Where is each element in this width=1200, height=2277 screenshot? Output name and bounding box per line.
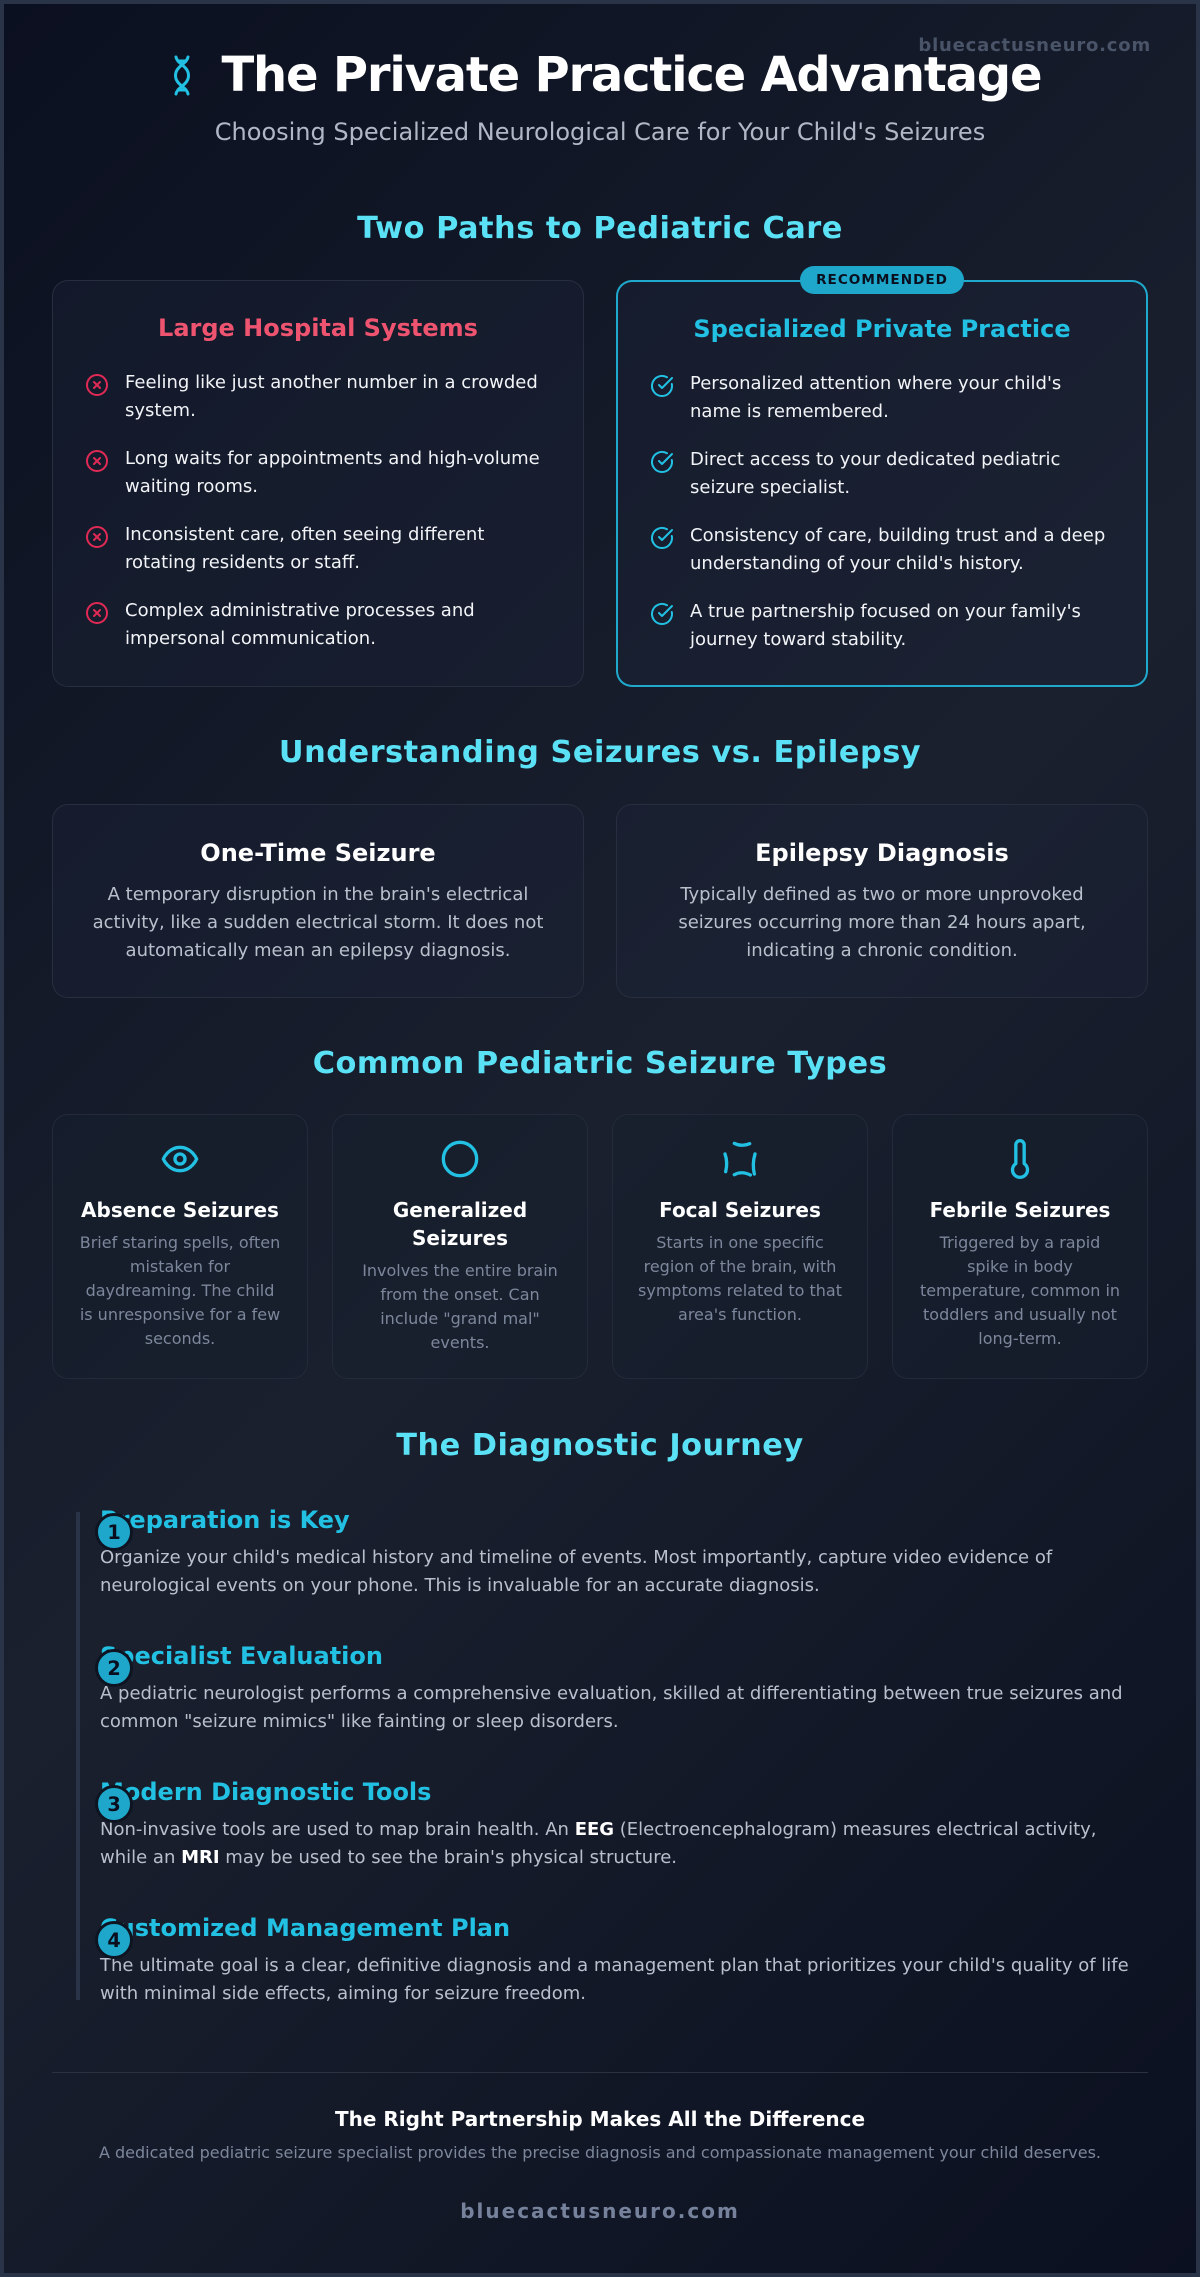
card text: is unresponsive for a few [80,1305,280,1324]
card text: region of the brain, with [644,1257,836,1276]
badge: recommended [800,266,964,294]
step 1 number: 1 [107,1521,121,1544]
icon: x circle [86,374,108,396]
list item [690,601,1081,650]
panel: febrile seizures [892,1114,1148,1379]
panel: specialized private practice [616,280,1148,687]
icon: focal arcs [723,1142,757,1177]
list item: Personalized attention where your child's [690,373,1061,394]
panel: one-time seizure [52,804,584,998]
card text [93,884,543,961]
list item [125,448,540,497]
heading: diagnostic journey: The Diagnostic Journey [396,1428,804,1463]
card text: Involves the entire brain [362,1261,558,1280]
badge: recommended: RECOMMENDED [816,272,948,288]
step 1 text: Organize your child's medical history and timeline of events. Most importantly, capture video evidence of [100,1547,1052,1568]
panel: focal seizures [612,1114,868,1379]
heading: seizure types: Common Pediatric Seizure Types [313,1046,887,1081]
panel: epilepsy diagnosis [616,804,1148,998]
list item: A true partnership focused on your family's [690,601,1081,622]
card text: Typically defined as two or more unprovoked [680,884,1084,905]
step 4 number: 4 [107,1929,121,1952]
subtitle: Choosing Specialized Neurological Care for Your Child's Seizures [215,118,985,146]
step 3 text: Non-invasive tools are used to map brain health. An EEG (Electroencephalogram) measures electrical activity, [100,1819,1097,1840]
card text [638,1233,842,1324]
step 2 number [95,1649,133,1687]
list item [125,372,538,421]
icon: thermometer [1010,1139,1030,1179]
heading: seizures vs epilepsy: Understanding Seizures vs. Epilepsy [279,735,921,770]
card text: include "grand mal" [380,1309,540,1328]
list item [690,525,1105,574]
step 1 heading: Preparation is Key [100,1506,350,1534]
list item: Consistency of care, building trust and a deep [690,525,1105,546]
step 1 number [95,1513,133,1551]
panel: large hospital systems [52,280,584,687]
card heading: Epilepsy Diagnosis [755,839,1009,867]
step 2 text [100,1683,1123,1732]
card title: Seizures [412,1226,508,1250]
icon: x circle [86,450,108,472]
list item: Feeling like just another number in a crowded [125,372,538,393]
step 4 number [95,1921,133,1959]
list item: seizure specialist. [690,477,850,498]
card text: seconds. [145,1329,215,1348]
icon: check circle [650,450,673,473]
list item: Direct access to your dedicated pediatric [690,449,1060,470]
card text: daydreaming. The child [86,1281,274,1300]
step 2 text: common "seizure mimics" like fainting or sleep disorders. [100,1711,619,1732]
list item: name is remembered. [690,401,889,422]
icon: check circle [650,526,673,549]
step 4 text: The ultimate goal is a clear, definitive diagnosis and a management plan that prioritizes your child's quality of life [100,1955,1129,1976]
step 3 text: while an MRI may be used to see the brain's physical structure. [100,1847,677,1868]
list item: journey toward stability. [690,629,906,650]
title: The Private Practice Advantage [222,47,1041,103]
footer site name: bluecactusneuro.com [460,2199,740,2223]
panel heading: Large Hospital Systems [158,314,478,342]
card text: long-term. [978,1329,1062,1348]
heading: two paths: Two Paths to Pediatric Care [357,211,843,246]
step 3 text [100,1819,1097,1868]
card text [920,1233,1120,1348]
step 1 text [100,1547,1053,1596]
card text: mistaken for [130,1257,230,1276]
step 4 text [100,1955,1129,2004]
list item: system. [125,400,196,421]
card text: A temporary disruption in the brain's electrical [108,884,528,905]
footer heading: The Right Partnership Makes All the Difference [335,2107,865,2131]
step 4 heading: Customized Management Plan [100,1914,510,1942]
step 2 text: A pediatric neurologist performs a comprehensive evaluation, skilled at differentiating between true seizures and [100,1683,1123,1704]
card text: Triggered by a rapid [940,1233,1100,1252]
card text [362,1261,558,1352]
list item [125,600,475,649]
icon: circle [442,1140,478,1178]
card text [678,884,1086,961]
list item: impersonal communication. [125,628,376,649]
card text: Starts in one specific [656,1233,824,1252]
card text: seizures occurring more than 24 hours apart, [678,912,1086,933]
card text: symptoms related to that [638,1281,842,1300]
step 3 heading: Modern Diagnostic Tools [100,1778,431,1806]
card title: Absence Seizures [81,1198,279,1222]
card text [80,1233,280,1348]
list item: understanding of your child's history. [690,553,1024,574]
card title [393,1198,527,1250]
icon: x circle [86,526,108,548]
list item: Long waits for appointments and high-volume [125,448,540,469]
footer [52,2072,1148,2242]
list item [690,373,1061,422]
icon: check circle [650,602,673,625]
card text: Brief staring spells, often [80,1233,280,1252]
icon: check circle [650,374,673,397]
step 3 number [95,1785,133,1823]
timeline line [76,1512,80,2000]
card title: Generalized [393,1198,527,1222]
list item [125,524,484,573]
icon: eye [162,1146,198,1172]
card text: from the onset. Can [380,1285,540,1304]
icon: x circle [86,602,108,624]
panel heading: Specialized Private Practice [693,315,1071,343]
watermark: site name: bluecactusneuro.com [918,35,1151,56]
list item: waiting rooms. [125,476,258,497]
card heading: One-Time Seizure [200,839,436,867]
card text: events. [430,1333,490,1352]
card title: Focal Seizures [659,1198,821,1222]
list item [690,449,1060,498]
list item: Complex administrative processes and [125,600,475,621]
card text: spike in body [967,1257,1073,1276]
step 3 number: 3 [107,1793,121,1816]
card title: Febrile Seizures [930,1198,1110,1222]
card text: activity, like a sudden electrical storm. It does not [93,912,543,933]
step 2 number: 2 [107,1657,121,1680]
card text: temperature, common in [920,1281,1120,1300]
card text: indicating a chronic condition. [746,940,1018,961]
card text: automatically mean an epilepsy diagnosis. [126,940,510,961]
card text: toddlers and usually not [923,1305,1117,1324]
list item: rotating residents or staff. [125,552,360,573]
panel: generalized seizures [332,1114,588,1379]
step 1 text: neurological events on your phone. This is invaluable for an accurate diagnosis. [100,1575,820,1596]
step 2 heading: Specialist Evaluation [100,1642,383,1670]
icon: DNA strand [174,56,190,96]
panel: absence seizures [52,1114,308,1379]
footer text: A dedicated pediatric seizure specialist provides the precise diagnosis and compassionate management your child deserves. [99,2143,1101,2162]
card text: area's function. [678,1305,802,1324]
step 4 text: with minimal side effects, aiming for seizure freedom. [100,1983,586,2004]
list item: Inconsistent care, often seeing different [125,524,484,545]
